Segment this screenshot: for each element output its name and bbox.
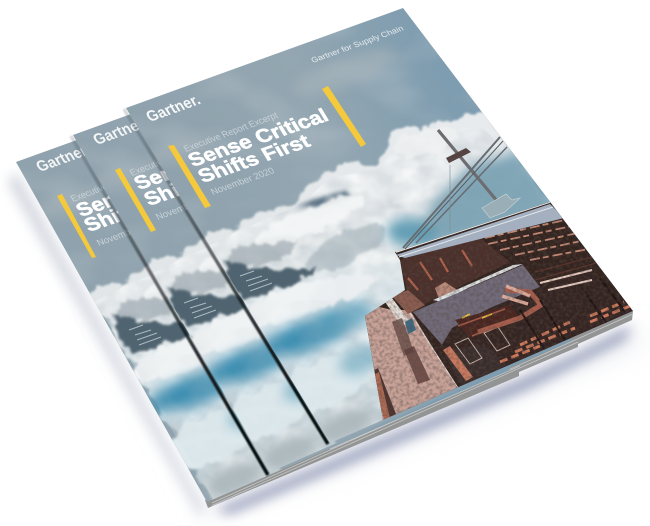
ship mast and rigging <box>403 130 520 249</box>
front right yellow bar <box>322 86 366 147</box>
front left yellow bar <box>168 145 211 208</box>
front logo: Gartner. <box>143 92 204 125</box>
back copy title: Sense Critical <box>72 155 221 221</box>
back copy yellow bar <box>57 194 96 258</box>
booklet: back copy <box>16 140 510 502</box>
series label: Gartner for Supply Chain <box>309 24 405 65</box>
middle copy yellow bar <box>115 168 156 232</box>
front date: November 2020 <box>209 166 277 198</box>
front subtitle: Executive Report Excerpt <box>182 110 281 155</box>
front title line 2: Shifts First <box>194 131 315 187</box>
back copy subtitle: Executive Report Excerpt <box>69 160 168 205</box>
back copy logo: Gartner. <box>33 142 94 175</box>
stacked page edges <box>205 311 633 508</box>
drop shadow under booklets <box>8 170 640 518</box>
middle copy subtitle: Executive Report Excerpt <box>128 134 227 179</box>
back copy title line 2: Shifts First <box>80 180 201 236</box>
middle copy title: Sense Critical <box>130 128 279 194</box>
middle copy logo: Gartner. <box>90 115 151 148</box>
orange lower decks <box>500 302 630 362</box>
front cover photograph <box>126 8 633 443</box>
back copy spine shadow <box>71 136 268 475</box>
middle copy date: November 2020 <box>154 191 222 223</box>
back copy date: November 2020 <box>95 217 163 249</box>
booklet: front copy <box>126 8 633 443</box>
booklet: middle copy <box>73 114 573 470</box>
middle copy title line 2: Shifts First <box>140 154 261 210</box>
ship superstructure <box>365 202 633 420</box>
front title: Sense Critical <box>184 105 333 171</box>
front copy spine shadow <box>124 109 328 444</box>
upper roof with salmon stripes <box>485 220 594 260</box>
